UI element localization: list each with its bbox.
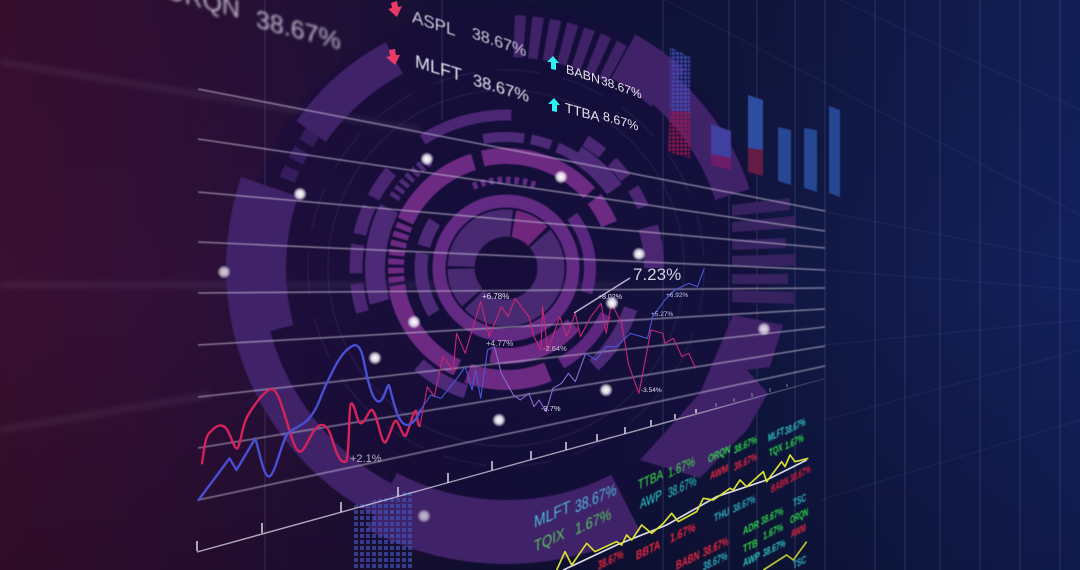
column: red lower: BBTA	[636, 538, 660, 563]
row: MLFT	[534, 480, 617, 532]
dial: ring three	[382, 144, 630, 392]
column: upper right: TTB	[743, 537, 758, 556]
row: AWP: 38.67%	[668, 472, 697, 502]
dial: ring five	[321, 83, 691, 453]
chart value labels: -3.7%	[541, 404, 561, 413]
column: upper right: AWM	[791, 521, 806, 540]
line chart: yellow ticker series	[557, 455, 808, 570]
column: upper right: MLFT	[768, 424, 784, 444]
column: upper right: 38.67%	[763, 536, 786, 559]
dial: inner ring	[443, 205, 569, 331]
chart value labels: +6.92%	[666, 292, 688, 299]
column: upper right: 1.67%	[763, 521, 784, 543]
ticker: MLFT: 38.67%	[473, 70, 529, 106]
white trend line	[563, 460, 807, 570]
ticker: BABN: 38.67%	[601, 73, 642, 102]
column: upper right: 38.67%	[733, 492, 756, 515]
column: upper right: ORQN	[708, 443, 730, 466]
row: TQIX	[534, 505, 611, 556]
bar 3	[748, 95, 763, 176]
ticker: MLFT	[415, 50, 529, 106]
column: upper right: AWM	[710, 462, 728, 483]
dial: dark notch under chart	[522, 403, 552, 424]
row: TTBA: 1.67%	[668, 453, 695, 481]
column: upper right	[708, 415, 811, 570]
column: upper right: ORQN	[790, 506, 808, 526]
chart value labels: -2.64%	[543, 344, 567, 353]
dial: centre hub	[475, 237, 537, 299]
dial: thin outline rings	[308, 70, 704, 466]
bar 5	[804, 128, 817, 192]
horizontal perspective lines	[198, 89, 825, 500]
ticker: ORQN	[165, 0, 341, 56]
top-right dotted bar chart	[668, 47, 840, 197]
bar 2	[711, 124, 731, 170]
chart value labels	[350, 265, 688, 465]
column: upper right: TQX	[769, 441, 783, 459]
bottom ticker table	[534, 415, 811, 570]
dial: outer sectors	[151, 0, 861, 570]
ticker: TTBA	[565, 100, 638, 134]
line chart: blue series	[199, 268, 704, 500]
row: MLFT: 38.67%	[575, 480, 617, 517]
row: TQIX: TQIX	[534, 525, 565, 556]
chart value labels: +4.77%	[486, 339, 513, 348]
ticker: BABN	[566, 61, 642, 102]
column: upper right: ADR	[743, 518, 759, 538]
chart value labels: +8.02%	[598, 294, 622, 301]
dial: right stripes	[732, 198, 796, 304]
column: upper right: AWP	[743, 549, 760, 570]
column: upper right: 38.67%	[785, 415, 806, 437]
ticker: ASPL: 38.67%	[472, 24, 527, 61]
row: AWP	[640, 472, 697, 512]
ticker: MLFT: MLFT	[415, 50, 462, 85]
bottom dotted bar	[352, 490, 412, 570]
ticker: ASPL	[412, 6, 527, 61]
row: AWP: AWP	[640, 486, 662, 512]
ticker: TTBA: TTBA	[565, 100, 600, 125]
chart value labels: +5.27%	[651, 311, 673, 318]
row: TTBA: TTBA	[638, 466, 664, 493]
bar 1	[668, 47, 690, 158]
bar 6	[829, 106, 840, 197]
tick axis	[197, 378, 825, 552]
leader line to 7.23%	[574, 278, 630, 313]
line chart: red series	[202, 298, 696, 463]
column: red lower: 38.67%	[703, 534, 729, 561]
dark disc behind dial	[244, 6, 768, 530]
top ticker labels	[165, 0, 642, 134]
icon: cyan up arrows	[547, 56, 560, 112]
column: upper right: 38.67%	[761, 504, 784, 527]
bar 4	[778, 127, 791, 185]
chart value labels: -3.54%	[641, 387, 662, 394]
column: upper right: THU	[714, 505, 729, 525]
dial: lower right sector	[640, 315, 783, 478]
dial: ring six	[294, 56, 718, 480]
icon: red down arrows	[386, 1, 402, 65]
chart value labels: +6.78%	[482, 292, 509, 301]
column: red lower: 1.67%	[670, 521, 695, 546]
ticker: BABN: BABN	[566, 61, 600, 87]
column: upper right: 1.67%	[785, 431, 804, 452]
radial dial	[151, 0, 861, 570]
column: red lower	[598, 521, 729, 570]
lower yellow series	[763, 542, 807, 570]
row: TTBA	[638, 453, 695, 493]
ticker: ASPL: ASPL	[412, 6, 456, 40]
row: TQIX: 1.67%	[575, 505, 611, 539]
chart value labels: 7.23%	[633, 265, 681, 284]
yellow series	[557, 455, 808, 570]
glowing data nodes	[217, 152, 771, 523]
column: upper right: TSC	[793, 491, 806, 509]
column: upper right: 38.67%	[734, 433, 758, 457]
row: MLFT: MLFT	[534, 497, 570, 532]
ticker: ORQN: 38.67%	[256, 5, 341, 56]
ticker: TTBA: 8.67%	[603, 108, 638, 134]
dial: ring two	[439, 201, 573, 335]
column: upper right: 38.67%	[734, 450, 758, 474]
dial: ring four magenta	[349, 111, 663, 425]
column: upper right: BABN 38.67%	[771, 462, 811, 495]
chart value labels: +2.1%	[350, 453, 382, 465]
